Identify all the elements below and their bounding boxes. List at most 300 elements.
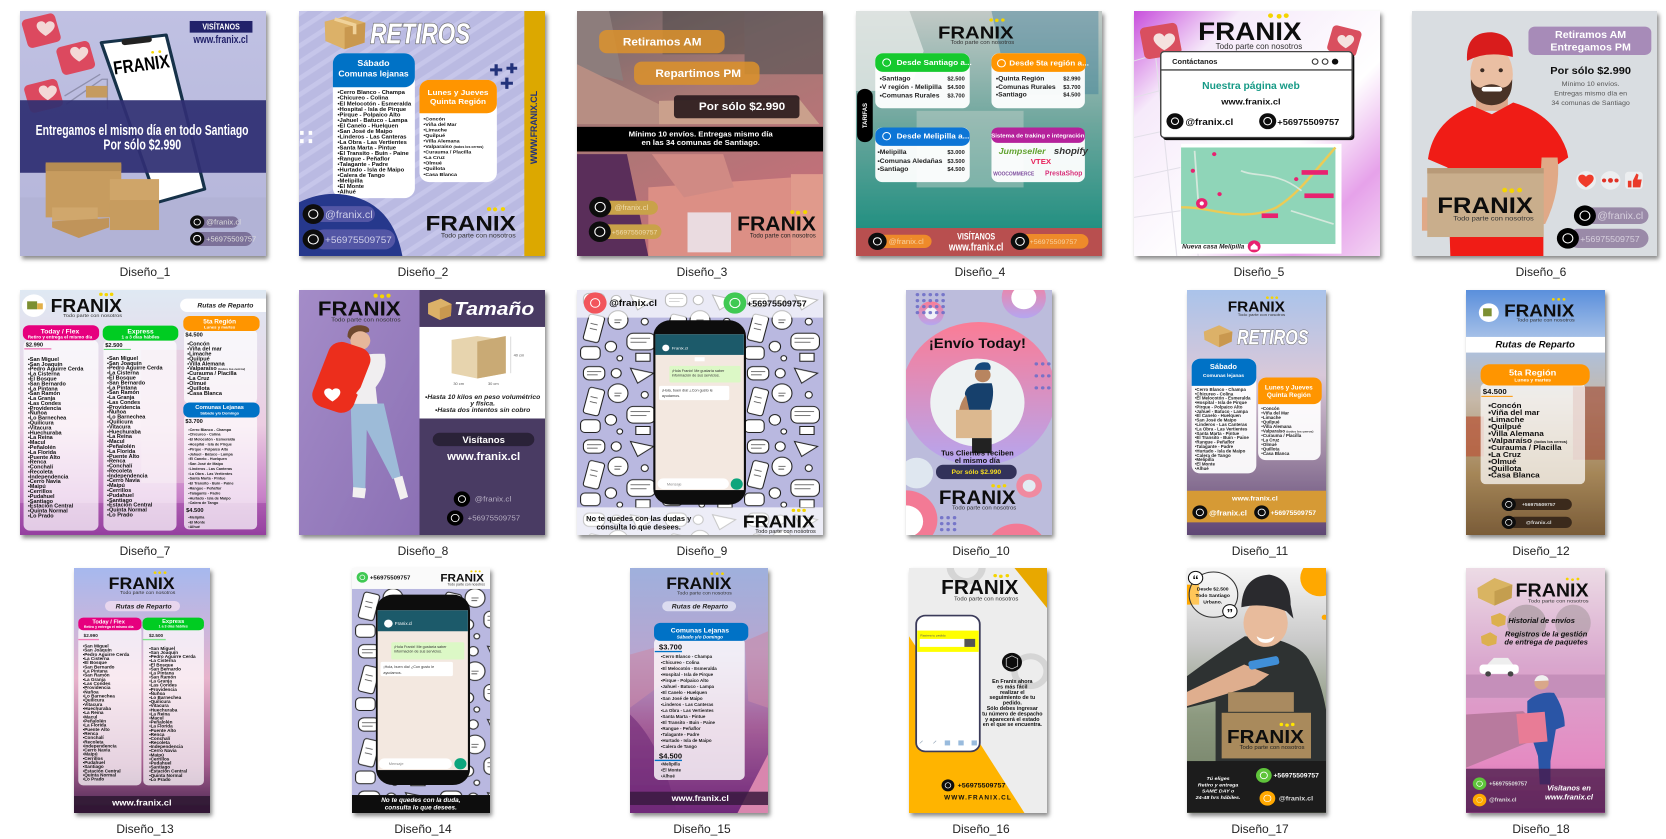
bottom contact band — [1187, 761, 1326, 813]
column: express: ▪Cerrillos — [149, 757, 170, 761]
panel: sábado: •El Melocotón - Esmeralda — [1195, 396, 1251, 401]
column: express: $2.500 — [105, 343, 123, 349]
panel: sábado: •Linderos - Las Canteras — [1195, 422, 1248, 427]
panel: Diseño 7 — [20, 290, 273, 538]
quote bubble — [1188, 571, 1238, 620]
phone with chat: Franix.cl — [672, 346, 688, 351]
panel: Diseño 13 — [74, 568, 212, 816]
column: comunas lejanas: ▪Rangue - Peñaflor — [188, 487, 222, 490]
bottom contact band: @franix.cl — [1489, 798, 1517, 804]
photo: courier with phone — [1187, 575, 1326, 768]
social contacts: @franix.cl — [325, 210, 373, 221]
social contacts — [1557, 205, 1648, 249]
panel: desde 5ta región: $2.990 — [1063, 77, 1081, 83]
bottom band: VISÍTANOS — [957, 232, 996, 242]
logo: FRANIX — [1228, 299, 1285, 315]
column: comunas lejanas: $4.500 — [186, 508, 204, 514]
panel: comunas lejanas: $3.700 — [659, 643, 682, 651]
panel: sábado: •Calera de Tango — [338, 173, 385, 179]
size notes: ▪Hasta dos intentos sin cobro — [435, 407, 530, 414]
logo: Todo parte con nosotros — [441, 233, 516, 239]
column: comunas lejanas: ▪Chicureo - Colina — [188, 433, 222, 437]
heading: same-day delivery — [36, 123, 249, 153]
heading: rutas: Rutas de Reparto — [672, 604, 728, 611]
heading: rutas: Rutas de Reparto — [197, 302, 253, 309]
column: today flex — [78, 618, 141, 785]
column: express: ▪Quinta Normal — [149, 773, 182, 778]
visit box — [190, 21, 252, 46]
column: today flex: ▪La Florida — [28, 450, 56, 456]
column: today flex: ▪Maipú — [83, 752, 98, 757]
panel: sábado: •El Monte — [338, 184, 364, 190]
column: today flex: ▪Pedro Aguirre Cerda — [28, 367, 83, 373]
icon: package — [1002, 653, 1022, 672]
pill: retiramos entregamos: Retiramos AM — [1555, 30, 1626, 41]
box size diagram: 30 cm — [488, 382, 499, 386]
logo: FRANIX — [1504, 301, 1574, 320]
contact shape — [299, 194, 402, 256]
icon: hearts — [21, 12, 96, 114]
column: 5ta región: ▪La Cruz — [187, 376, 210, 382]
panel: comunas lejanas: ▪Cerro Blanco - Champa — [661, 654, 713, 659]
column: 5ta región: ▪Valparaíso (todos los cerros) — [187, 366, 245, 372]
column: today flex: ▪San Bernardo — [28, 382, 67, 387]
panel: desde santiago: Desde Santiago a... — [897, 58, 972, 67]
column: express: ▪San Joaquín — [149, 650, 178, 655]
column: express: ▪Lo Barnechea — [149, 695, 182, 700]
icon: box — [428, 299, 452, 320]
column: express: ▪Macul — [107, 439, 125, 445]
column: express: ▪Lo Prado — [149, 777, 171, 782]
column: comunas lejanas: ▪El Canelo - Huelquen — [188, 457, 227, 461]
quote bubble: Todo Santiago — [1196, 593, 1230, 599]
column: today flex: ▪Ñuñoa — [28, 410, 47, 417]
panel: Diseño 3 — [577, 11, 825, 259]
column: 5ta región: ▪Limache — [187, 352, 212, 357]
message: el mismo día — [955, 456, 1001, 465]
heading: rutas — [105, 601, 180, 611]
column: today flex: ▪Macul — [83, 714, 97, 719]
logo: Todo parte con nosotros — [952, 506, 1017, 512]
column: today flex: ▪Recoleta — [83, 739, 104, 744]
social contacts: @franix.cl — [615, 203, 649, 212]
column: today flex: ▪Cerro Navia — [83, 748, 111, 753]
column: today flex: $2.990 — [26, 343, 43, 349]
phone with chat: información de sus servicios. — [672, 374, 720, 378]
box size diagram: 40 cm — [514, 354, 524, 358]
column: express: ▪Lo Prado — [107, 513, 134, 518]
column: express: ▪Estación Central — [149, 769, 187, 774]
panel: Diseño 12 — [1466, 290, 1607, 538]
panel: desde 5ta región: ▪Quinta Región — [996, 76, 1044, 83]
panel: quinta región: Quinta Región — [430, 97, 486, 106]
photo: courier — [1516, 675, 1565, 784]
icon: box — [1204, 325, 1232, 347]
panel: comunas lejanas: ▪Hospital - Isla de Pirque — [661, 672, 714, 677]
panel: comunas lejanas: ▪San José de Maipo — [661, 696, 703, 701]
panel: Diseño 5 — [1134, 11, 1382, 259]
panel: sábado: •Rangue - Peñaflor — [1195, 440, 1235, 445]
column: express: ▪Vitacura — [149, 703, 169, 708]
column: express: ▪La Granja — [107, 395, 134, 401]
contact window: www.franix.cl — [1220, 97, 1281, 106]
bottom contact band: 24-48 hrs hábiles. — [1195, 795, 1240, 801]
column: express: ▪Cerrillos — [107, 488, 131, 494]
photo: cardboard boxes — [577, 98, 823, 256]
logo: FRANIX — [941, 577, 1019, 599]
top strip: Todo parte con nosotros — [448, 582, 485, 586]
panel: comunas lejanas: ▪Alhué — [661, 774, 675, 779]
labels: design names: Diseño_11 — [1232, 544, 1289, 558]
column: express: ▪Quilicura — [149, 699, 171, 704]
logo — [1479, 298, 1575, 323]
boxes with logo — [1222, 692, 1311, 758]
column: express: ▪La Florida — [107, 449, 135, 455]
social contacts — [190, 215, 256, 246]
panel: quinta región: Lunes y Jueves — [1265, 385, 1313, 391]
column: express: ▪Renca — [149, 732, 165, 737]
column: today flex: ▪San Joaquín — [28, 362, 63, 368]
column: today flex: ▪Las Condes — [28, 401, 61, 407]
column: express: ▪La Cisterna — [107, 371, 139, 377]
column: today flex: ▪La Granja — [28, 396, 55, 402]
column: express: ▪Independencia — [149, 744, 183, 749]
phone with chat: Mensaje — [667, 483, 682, 487]
labels: design names: Diseño_7 — [120, 544, 171, 558]
contact window — [1161, 52, 1354, 140]
phone with tracking — [916, 616, 980, 751]
column: today flex: ▪Peñalolén — [83, 719, 106, 723]
boxes with logo: FRANIX — [1227, 727, 1304, 748]
panel: sábado: •Talagante - Padre — [1195, 444, 1234, 449]
panel: integraciones: PrestaShop — [1045, 169, 1083, 177]
social contacts — [447, 491, 520, 526]
panel: región: ▪Casa Blanca — [1488, 471, 1540, 480]
icon: plus signs — [490, 63, 517, 89]
column: comunas lejanas: $3.700 — [185, 419, 203, 425]
panel: sábado: •Hospital - Isla de Pirque — [338, 107, 406, 113]
social contacts: +56975509757 — [206, 235, 256, 243]
panel: quinta región: •Quillota — [423, 166, 445, 172]
panel: región: ▪Villa Alemana — [1488, 429, 1544, 438]
column: express: ▪Providencia — [149, 687, 177, 692]
panel: sábado — [1192, 359, 1256, 473]
panel: comunas lejanas: Comunas Lejanas — [671, 628, 729, 635]
panel: desde 5ta región: $4.500 — [1063, 93, 1081, 98]
column: comunas lejanas: ▪Talagante - Padre — [188, 492, 220, 495]
logo: FRANIX — [426, 211, 516, 235]
panel: sábado: •La Obra - Las Vertientes — [338, 140, 407, 146]
column: 5ta región: ▪Quilpué — [187, 357, 210, 362]
logo: Todo parte con nosotros — [950, 40, 1015, 46]
heading: rutas: Rutas de Reparto — [1495, 340, 1575, 349]
panel: comunas lejanas — [654, 623, 748, 780]
panel: desde melipilla: $4.500 — [947, 167, 965, 173]
column: express: ▪El Bosque — [149, 662, 174, 667]
panel: quinta región — [1258, 378, 1322, 460]
panel: sábado: •Alhué — [338, 190, 356, 196]
column: today flex: ▪Quilicura — [28, 421, 54, 426]
column: 5ta región: ▪Quillota — [187, 386, 210, 392]
labels: design names: Diseño_5 — [1234, 265, 1285, 279]
photo: delivery man in circle — [930, 359, 1025, 453]
panel: comunas lejanas: ▪Santa Marta - Pintue — [661, 714, 706, 719]
tab: tarifas — [857, 89, 873, 142]
column: today flex: ▪San Ramón — [83, 673, 110, 678]
phone with chat: ¡Hola Franix! Me gustaría saber — [672, 369, 725, 373]
panel: desde melipilla: ▪Santiago — [877, 166, 908, 173]
pill: retiramos — [599, 30, 725, 53]
labels: design names: Diseño_9 — [677, 544, 728, 558]
panel: comunas lejanas: ▪Melipilla — [661, 762, 681, 767]
panel: integraciones — [991, 128, 1089, 182]
column: comunas lejanas: ▪Calera de Tango — [188, 501, 219, 505]
column: express — [143, 618, 204, 785]
bottom message: No te quedes con la duda, — [381, 797, 461, 804]
panel: región: ▪Olmué — [1488, 457, 1517, 466]
heading: rutas — [1466, 337, 1605, 353]
column: today flex: ▪Maipú — [28, 484, 46, 490]
icon: box — [325, 16, 365, 49]
logo: Todo parte con nosotros — [954, 597, 1019, 603]
logo: FRANIX — [318, 297, 401, 320]
panel: quinta región: •Viña del Mar — [423, 122, 457, 128]
labels: design names: Diseño_14 — [394, 822, 452, 836]
band — [20, 100, 266, 173]
price text — [1550, 66, 1631, 107]
column: comunas lejanas: ▪El Monte — [188, 520, 205, 524]
panel: quinta región: •Quilpué — [423, 133, 445, 139]
size notes: ▪Hasta 10 kilos en peso volumétrico — [425, 394, 540, 401]
feature list: Historial de envíos — [1508, 616, 1575, 625]
icon: shopping cart — [65, 74, 107, 109]
panel: quinta región: •Limache — [423, 128, 447, 133]
quote bubble: “ — [1192, 573, 1199, 587]
phone with chat — [376, 595, 470, 785]
contact window: Nuestra página web — [1202, 82, 1300, 92]
logo: FRANIX — [109, 574, 175, 593]
labels: design names: Diseño_3 — [677, 265, 728, 279]
column: today flex: ▪Peñalolén — [28, 445, 56, 451]
panel: sábado: •Cerro Blanco - Champa — [338, 90, 406, 96]
panel: región — [1481, 364, 1590, 484]
column: 5ta región: Lunes y martes — [204, 325, 236, 330]
heading: rutas — [180, 299, 273, 312]
column: today flex: Today / Flex — [92, 620, 126, 626]
column: express: ▪Ñuñoa — [149, 690, 166, 696]
message — [936, 449, 1017, 479]
phone with chat: ayudamos. — [383, 671, 402, 675]
bottom contact band — [1466, 769, 1605, 813]
tracking text: y aparecerá el estado — [985, 717, 1040, 723]
logo with box: Todo parte con nosotros — [1528, 598, 1589, 604]
price text: Mínimo 10 envíos. — [1562, 81, 1620, 88]
panel: sábado: •Hospital - Isla de Pirque — [1195, 400, 1247, 405]
column: express: ▪El Bosque — [107, 376, 136, 381]
column: express: ▪La Pintana — [107, 385, 137, 391]
panel: integraciones: WOOCOMMERCE — [993, 172, 1034, 177]
column: today flex: ▪Cerrillos — [28, 489, 52, 495]
message and logo: FRANIX — [743, 511, 815, 531]
panel: quinta región: Lunes y Jueves — [428, 88, 489, 97]
panel: sábado: •Jahuel - Batuco - Lampa — [1195, 409, 1248, 414]
column: today flex: ▪San Joaquín — [83, 648, 112, 653]
column: today flex: ▪Vitacura — [83, 702, 103, 707]
panel: sábado: •Hurtado - Isla de Maipo — [338, 168, 405, 174]
contact window: Contáctanos — [1172, 57, 1217, 66]
bottom band — [74, 796, 210, 813]
logo: Todo parte con nosotros — [750, 233, 816, 239]
side bar: WWW.FRANIX.CL — [529, 91, 539, 164]
column: comunas lejanas — [183, 403, 260, 529]
panel: sábado: •El Monte — [1195, 462, 1216, 467]
column: express: ▪Huechuraba — [107, 429, 141, 435]
column: today flex: ▪La Reina — [83, 710, 104, 715]
contact band: www.franix.cl — [1231, 496, 1278, 503]
logo: Todo parte con nosotros — [331, 318, 401, 324]
social contacts: +56975509757 — [325, 235, 392, 246]
message and logo — [586, 509, 816, 535]
column: 5ta región: ▪Casa Blanca — [187, 391, 222, 397]
column: 5ta región: ▪Curauma / Placilla — [187, 371, 237, 377]
column: comunas lejanas: ▪El Melocotón - Esmeralda — [188, 438, 236, 442]
band: en las 34 comunas de Santiago. — [642, 138, 760, 147]
map: Nueva casa Melipilla — [1182, 244, 1245, 250]
panel: región: Lunes y martes — [1514, 378, 1551, 383]
phone with chat: ¡Hola Franix! Me gustaría saber — [394, 645, 447, 649]
column: today flex: ▪Estación Central — [28, 504, 74, 510]
panel: región: 5ta Región — [1509, 368, 1556, 377]
panel: región: ▪Quillota — [1488, 464, 1522, 473]
column: today flex: ▪Renca — [28, 460, 46, 466]
panel: sábado: •El Canelo - Huelquen — [338, 124, 399, 129]
panel: Diseño 9 — [577, 290, 825, 538]
column: today flex: ▪Lo Prado — [83, 777, 105, 782]
top strip: FRANIX — [440, 573, 484, 585]
column: express: ▪Cerro Navia — [149, 748, 177, 753]
tracking text: pedido. — [1003, 701, 1022, 706]
top strip — [352, 568, 490, 589]
price text: Por sólo $2.990 — [1550, 66, 1631, 77]
panel: sábado: •Alhué — [1195, 466, 1209, 471]
panel: Diseño 10 — [875, 277, 1056, 582]
column: express: ▪Cerro Navia — [107, 478, 140, 484]
social contacts: @franix.cl — [475, 495, 512, 504]
column: today flex: ▪Vitacura — [28, 426, 51, 431]
panel: Diseño 2 — [299, 11, 547, 259]
column: today flex: ▪Quinta Normal — [83, 773, 116, 778]
contact band: +56975509757 — [1271, 510, 1316, 517]
panel: región: ▪Concón — [1488, 401, 1522, 410]
box with logo: FRANIX — [1437, 193, 1533, 218]
bottom contact band: @franix.cl — [1279, 796, 1313, 803]
phone with chat: ayudamos. — [662, 394, 680, 398]
panel: quinta región: •Viña del Mar — [1261, 411, 1289, 415]
panel: sábado: •Jahuel - Batuco - Lampa — [338, 118, 408, 124]
column: express: ▪Las Condes — [149, 683, 177, 688]
panel: comunas lejanas: ▪Linderos - Las Canteras — [661, 702, 714, 707]
column: express: ▪Las Condes — [107, 400, 140, 406]
column: today flex: ▪San Miguel — [83, 644, 109, 649]
column: today flex: ▪Las Condes — [83, 681, 111, 686]
column: today flex: ▪Ñuñoa — [83, 689, 99, 694]
column: today flex: ▪La Pintana — [28, 386, 58, 392]
panel: sábado: •Melipilla — [338, 179, 364, 185]
panel: desde 5ta región — [991, 53, 1089, 108]
panel: región: ▪Valparaíso (todos los cerros) — [1488, 436, 1567, 445]
panel: quinta región: •La Cruz — [1261, 438, 1279, 442]
price text: 34 comunas de Santiago — [1551, 100, 1630, 107]
labels: design names: Diseño_10 — [952, 544, 1010, 558]
bottom contact band: Retiro y entrega — [1198, 783, 1239, 788]
panel: comunas lejanas: ▪El Melocotón - Esmeralda — [661, 666, 717, 671]
panel: quinta región: •Curauma / Placilla — [1261, 433, 1302, 438]
feature list: Registros de la gestión — [1505, 630, 1588, 639]
tracking text: En Franix ahora — [992, 679, 1033, 685]
column: express: ▪Peñalolén — [149, 720, 173, 725]
column: express: ▪Pudahuel — [149, 761, 171, 765]
pill: retiramos: Retiramos AM — [623, 37, 702, 48]
panel: sábado — [333, 53, 415, 198]
social contacts: +56975509757 — [1522, 502, 1556, 508]
panel: quinta región: •Quilpué — [1261, 420, 1280, 424]
panel: comunas lejanas: Sábado y/o Domingo — [677, 635, 723, 640]
panel: sábado: •Chicureo - Colina — [338, 96, 389, 102]
phone: FRANIX — [112, 52, 171, 79]
column: comunas lejanas: ▪La Obra - Las Vertientes — [188, 472, 232, 476]
panel: región: ▪Quilpué — [1488, 422, 1522, 431]
panel: comunas lejanas: ▪El Monte — [661, 768, 682, 773]
panel: Diseño 17 — [1187, 560, 1340, 816]
panel: comunas lejanas: ▪Pirque - Polpaico Alto — [661, 678, 709, 683]
social contacts — [1502, 498, 1572, 529]
labels: design names: Diseño_18 — [1512, 822, 1570, 836]
contact: whatsapp — [724, 292, 807, 314]
column: today flex: ▪Recoleta — [28, 470, 53, 475]
column: comunas lejanas: ▪San José de Maipo — [188, 462, 224, 466]
column: today flex: ▪San Ramón — [28, 391, 60, 397]
column: express: ▪La Reina — [107, 434, 132, 440]
bottom band: www.franix.cl — [671, 793, 729, 803]
column: today flex: ▪El Bosque — [28, 377, 57, 382]
column: today flex: ▪La Granja — [83, 677, 106, 682]
contact: WWW.FRANIX.CL — [944, 795, 1012, 802]
price text: Entregas mismo día en — [1554, 91, 1627, 97]
heading: same-day delivery: Por sólo $2.990 — [103, 138, 181, 153]
column: express: ▪Independencia — [107, 473, 148, 479]
panel: quinta región: •Olmué — [1261, 442, 1277, 447]
panel: sábado: •El Transito - Buin - Paine — [338, 151, 409, 157]
column: today flex: ▪Independencia — [28, 474, 68, 480]
column: express: ▪San Miguel — [107, 356, 139, 362]
band — [577, 127, 823, 151]
panel: Diseño 8 — [299, 290, 547, 538]
tab: tarifas: TARIFAS — [862, 103, 869, 128]
panel: comunas lejanas: $4.500 — [659, 752, 682, 760]
column: comunas lejanas: ▪Jahuel - Batuco - Lampa — [188, 452, 234, 456]
column: today flex: ▪Santiago — [28, 499, 54, 505]
panel: quinta región: •Concón — [423, 117, 445, 122]
panel: quinta región: •Valparaíso (todos los cerros) — [423, 144, 483, 150]
panel: quinta región: •Valparaíso (todos los cerros) — [1261, 429, 1313, 433]
bottom band: @franix.cl — [889, 237, 924, 246]
logo: Todo parte con nosotros — [1238, 312, 1285, 317]
column: 5ta región: ▪Viña del mar — [187, 347, 222, 352]
social contacts: +56975509757 — [1580, 234, 1640, 244]
column: comunas lejanas: ▪Linderos - Las Canteras — [188, 467, 232, 471]
social contacts: @franix.cl — [206, 218, 241, 226]
column: express: ▪Lo Barnechea — [107, 415, 145, 421]
